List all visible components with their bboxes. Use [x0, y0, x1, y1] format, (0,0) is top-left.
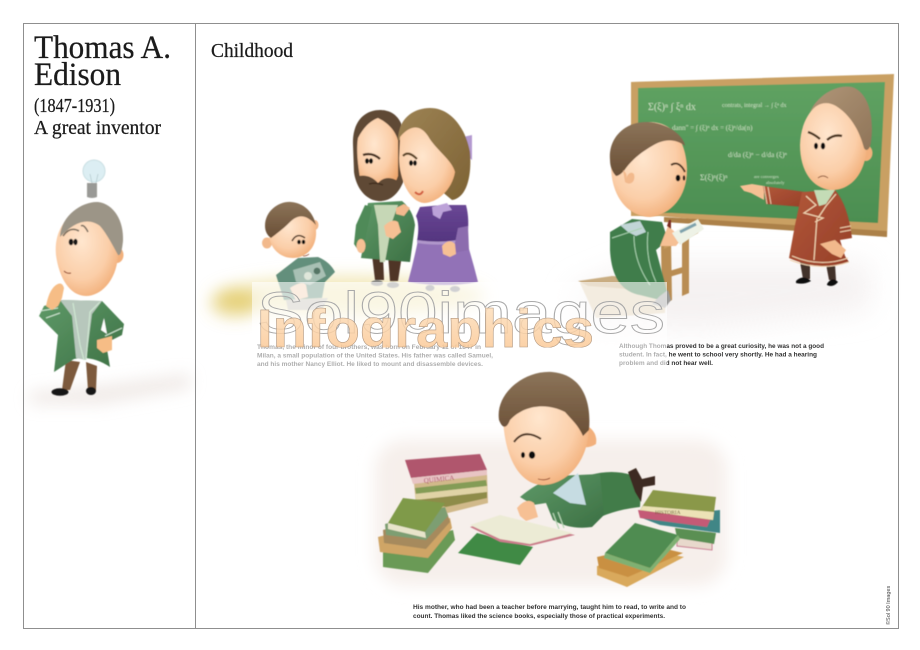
chalk formulas: dann" = ∫ (ξ)ⁿ dx = (ξ)ⁿ/da(n) [672, 124, 753, 132]
icon: light bulb [83, 160, 105, 198]
book: open [470, 515, 575, 546]
chalk formulas: absolutely [766, 180, 785, 185]
character: mother [398, 108, 478, 292]
book stack: olive [378, 498, 455, 573]
caption: reading [413, 604, 686, 620]
chalk formulas: Σ(ξ)ⁿ(ξ)ⁿ [700, 173, 728, 182]
section heading: Childhood [211, 40, 293, 62]
desk and stool [578, 227, 698, 318]
caption: school: student. In fact, he went to school very shortly. He had a hearing [619, 352, 817, 358]
character: Edison the inventor [39, 202, 124, 396]
book stack: pink: QUIMICA [423, 474, 455, 485]
caption: family: Thomas, the minor of four brothers, was born on February 11 of 1847 in [257, 344, 481, 351]
character: teacher [740, 86, 872, 286]
title: Edison [34, 57, 121, 93]
caption: school: Although Thomas proved to be a great curiosity, he was not a good [619, 343, 824, 350]
caption: reading: count. Thomas liked the science books, especially those of practical experiments. [413, 613, 665, 620]
watermark: Infographics: Infographics [257, 299, 594, 359]
caption: family: and his mother Nancy Elliot. He liked to mount and disassemble devices. [257, 361, 483, 368]
chalk formulas [648, 102, 788, 185]
chalk formulas: contrats, integral → ∫ ξⁿ dx [722, 102, 787, 109]
character: seated student [610, 122, 704, 308]
book stack: yellow and green [597, 523, 684, 587]
caption: family: Milan, a small population of the United States. His father was called Samuel, [257, 352, 493, 360]
floor shadow: inventor [30, 374, 190, 404]
floor: family [211, 276, 485, 317]
dates: (1847-1931) [34, 95, 115, 117]
watermark: Sol90images: Sol90images [257, 281, 665, 346]
floor: reading [375, 440, 727, 586]
caption: school: problem and did not hear well. [619, 360, 713, 367]
book stack: teal and pink [638, 490, 720, 550]
watermark panel [252, 282, 667, 370]
floor: classroom [570, 262, 870, 330]
caption: school [619, 343, 824, 367]
subtitle: A great inventor [34, 117, 161, 139]
caption: reading: His mother, who had been a teacher before marrying, taught him to read, to write and to [413, 604, 686, 611]
chalk formulas: Σ(ξ)ⁿ ∫ ξⁿ dx [648, 102, 696, 113]
chalk formulas: are converges [754, 174, 779, 179]
blackboard [631, 74, 894, 237]
title [34, 30, 171, 93]
title: Thomas A. [34, 30, 171, 66]
book: flat green [458, 533, 533, 565]
book stack: pink [405, 454, 488, 513]
character: father [353, 110, 415, 288]
character: Thomas reading [499, 372, 655, 529]
chalk formulas: d/da (ξ)ⁿ − d/da (ξ)ⁿ [728, 150, 788, 159]
book stack: teal and pink: HISTORIA [655, 510, 681, 516]
caption: family [257, 344, 493, 368]
copyright: ©Sol 90 Images [885, 586, 892, 625]
character: young Thomas with gears [262, 202, 335, 310]
